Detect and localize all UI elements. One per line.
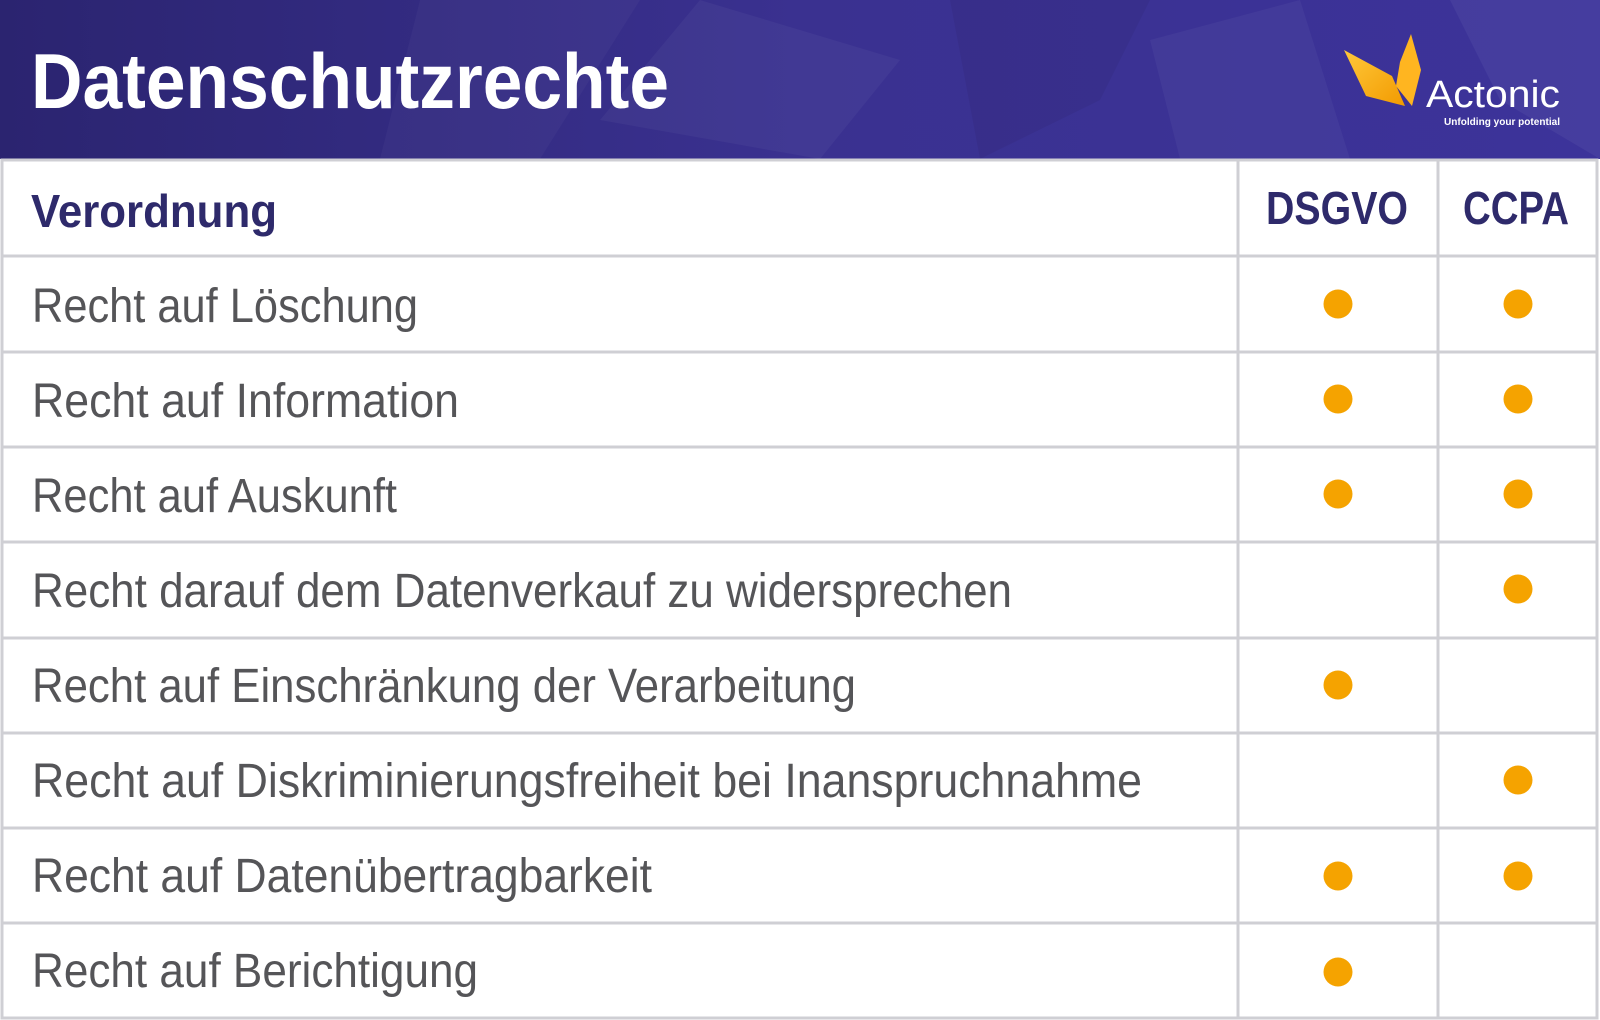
row labels: Recht auf Diskriminierungsfreiheit bei Inanspruchnahme	[32, 755, 1142, 808]
row labels: Recht auf Information	[32, 375, 459, 428]
header row: DSGVO	[1266, 182, 1408, 234]
row labels: Recht auf Auskunft	[32, 470, 397, 523]
logo: Actonic: Actonic	[1426, 74, 1560, 116]
row labels: Recht auf Berichtigung	[32, 945, 478, 998]
title: Datenschutzrechte	[31, 37, 669, 125]
logo: Actonic	[1344, 34, 1560, 128]
header row: CCPA	[1463, 182, 1569, 234]
row labels: Recht auf Löschung	[32, 280, 418, 333]
header row	[31, 182, 1569, 237]
header banner	[0, 0, 1600, 159]
row labels: Recht darauf dem Datenverkauf zu widersprechen	[32, 565, 1012, 618]
row labels: Recht auf Datenübertragbarkeit	[32, 850, 652, 903]
row labels	[32, 280, 1142, 998]
dots	[1324, 290, 1532, 986]
logo: Actonic: Unfolding your potential	[1444, 116, 1560, 128]
row labels: Recht auf Einschränkung der Verarbeitung	[32, 660, 856, 713]
header row: Verordnung	[31, 185, 277, 237]
